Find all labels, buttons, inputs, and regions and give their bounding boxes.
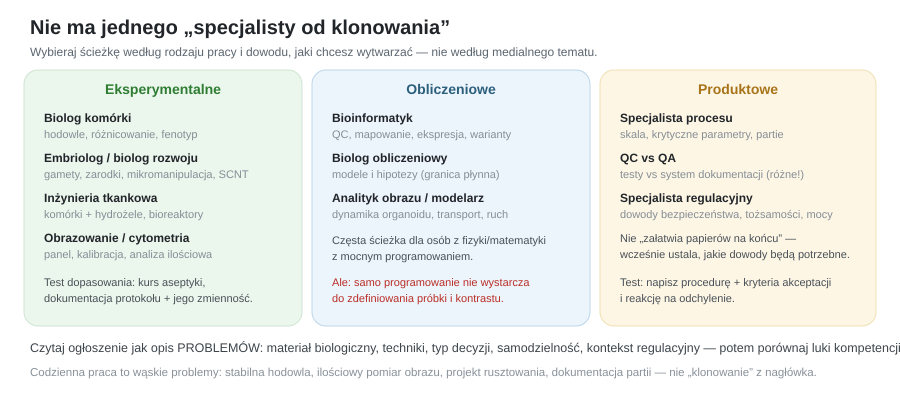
note: test: Test: napisz procedurę + kryteria akceptacji xyxy=(620,277,831,289)
note: częsta ścieżka: Częsta ścieżka dla osób z fizyki/matematyki xyxy=(332,235,546,247)
note: częsta ścieżka: z mocnym programowaniem. xyxy=(332,251,473,263)
note: częsta ścieżka xyxy=(332,235,546,263)
panel: Eksperymentalne xyxy=(24,70,302,326)
note: papiery: Nie „załatwia papierów na końcu” — xyxy=(620,233,796,245)
role: Inżynieria tkankowa xyxy=(44,191,204,221)
note: test xyxy=(620,277,831,305)
warning note: do zdefiniowania próbki i kontrastu. xyxy=(332,293,504,305)
role: Specjalista procesu: Specjalista procesu xyxy=(620,111,733,125)
role: Specjalista regulacyjny: dowody bezpieczeństwa, tożsamości, mocy xyxy=(620,209,833,221)
role: Specjalista procesu xyxy=(620,111,784,141)
role: Specjalista procesu: skala, krytyczne parametry, partie xyxy=(620,129,784,141)
role: Obrazowanie: Obrazowanie / cytometria xyxy=(44,231,190,245)
role: Biolog komórki: Biolog komórki xyxy=(44,111,131,125)
role: Bioinformatyk: QC, mapowanie, ekspresja, warianty xyxy=(332,129,512,141)
footnote: Codzienna praca to wąskie problemy: stabilna hodowla, ilościowy pomiar obrazu, projekt rusztowania, dokumentacja partii — nie „klonowanie” z nagłówka. xyxy=(30,367,817,379)
warning note xyxy=(332,277,530,305)
role: Analityk obrazu: dynamika organoidu, transport, ruch xyxy=(332,209,508,221)
role: QC vs QA: testy vs system dokumentacji (różne!) xyxy=(620,169,804,181)
role: Biolog komórki xyxy=(44,111,197,141)
role: Embriolog xyxy=(44,151,249,181)
warning note: Ale: samo programowanie nie wystarcza xyxy=(332,277,530,289)
role: Bioinformatyk: Bioinformatyk xyxy=(332,111,413,125)
note: papiery: wcześnie ustala, jakie dowody będą potrzebne. xyxy=(619,249,850,261)
note: papiery xyxy=(619,233,850,261)
role: Embriolog: gamety, zarodki, mikromanipulacja, SCNT xyxy=(44,169,249,181)
heading: Obliczeniowe: Obliczeniowe xyxy=(406,81,496,97)
panel: Obliczeniowe xyxy=(312,70,590,326)
role: Obrazowanie: panel, kalibracja, analiza ilościowa xyxy=(44,249,213,261)
role: Biolog obliczeniowy: Biolog obliczeniowy xyxy=(332,151,448,165)
role: Biolog obliczeniowy xyxy=(332,151,500,181)
note: test dopasowania: Test dopasowania: kurs aseptyki, xyxy=(44,277,205,289)
panel: Produktowe xyxy=(600,70,876,326)
role: Biolog komórki: hodowle, różnicowanie, fenotyp xyxy=(44,129,197,141)
title: Nie ma jednego „specjalisty od klonowania” xyxy=(30,17,450,39)
role: Biolog obliczeniowy: modele i hipotezy (granica płynna) xyxy=(332,169,500,181)
subtitle: Wybieraj ścieżkę według rodzaju pracy i dowodu, jaki chcesz wytwarzać — nie według medialnego tematu. xyxy=(30,45,598,59)
role: QC vs QA: QC vs QA xyxy=(620,151,676,165)
note: test: i reakcję na odchylenie. xyxy=(620,293,735,305)
role: Specjalista regulacyjny xyxy=(620,191,833,221)
role: Bioinformatyk xyxy=(332,111,512,141)
role: Embriolog: Embriolog / biolog rozwoju xyxy=(44,151,198,165)
note: test dopasowania: dokumentacja protokołu + jego zmienność. xyxy=(44,293,253,305)
role: Inżynieria tkankowa: komórki + hydrożele, bioreaktory xyxy=(44,209,204,221)
role: Analityk obrazu xyxy=(332,191,508,221)
role: Specjalista regulacyjny: Specjalista regulacyjny xyxy=(620,191,753,205)
heading: Produktowe: Produktowe xyxy=(698,81,778,97)
heading: Eksperymentalne: Eksperymentalne xyxy=(105,81,221,97)
role: Inżynieria tkankowa: Inżynieria tkankowa xyxy=(44,191,158,205)
role: QC vs QA xyxy=(620,151,804,181)
note: test dopasowania xyxy=(44,277,253,305)
role: Analityk obrazu: Analityk obrazu / modelarz xyxy=(332,191,484,205)
role: Obrazowanie xyxy=(44,231,213,261)
takeaway line: Czytaj ogłoszenie jak opis PROBLEMÓW: materiał biologiczny, techniki, typ decyzji, samodzielność, kontekst regulacyjny — potem porównaj luki kompetencji xyxy=(30,341,900,355)
